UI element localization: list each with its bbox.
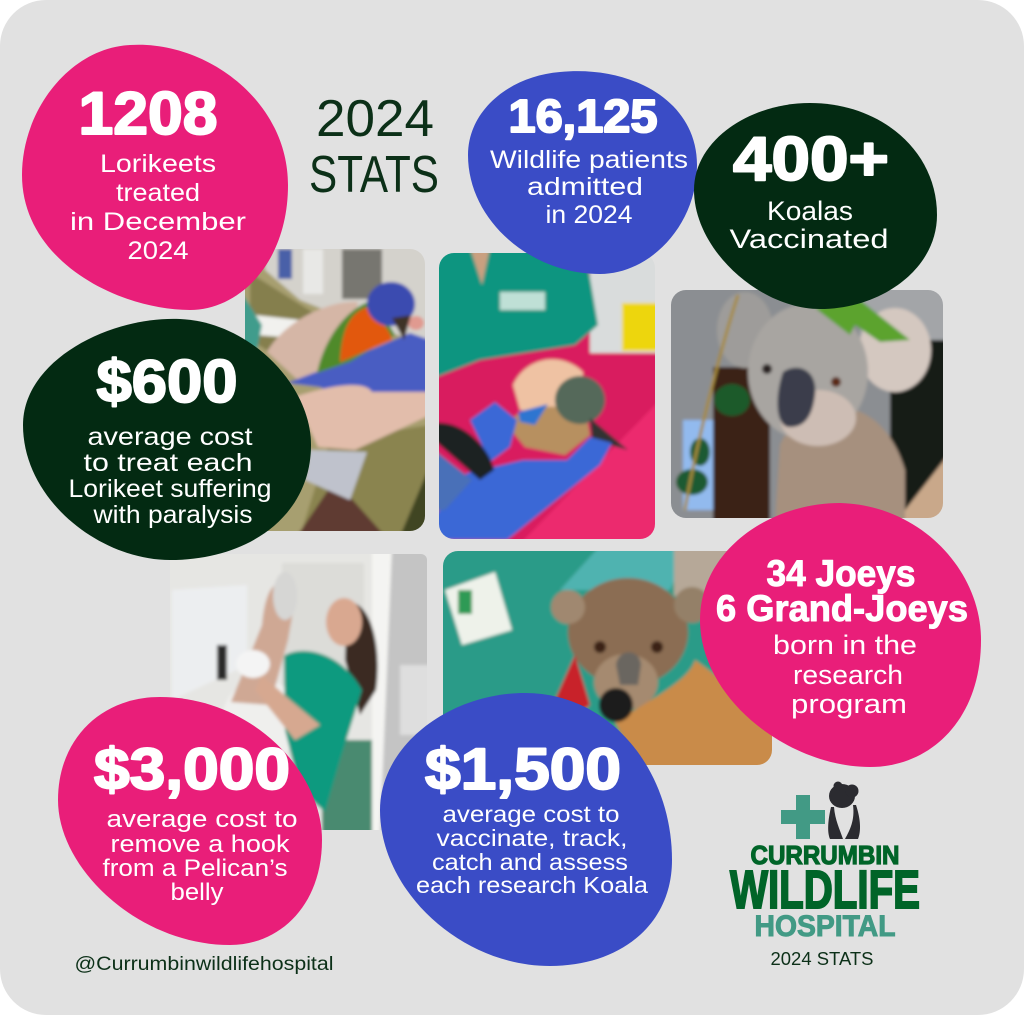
blob: 16,125 wildlife patients [468,71,697,274]
text: cost to treat lorikeet: to treat each [84,449,252,477]
text: born in research program: born in the [773,630,917,660]
blob: joeys born [700,503,981,767]
text: cost to vaccinate: average cost to [442,801,620,827]
title: 2024 stats: STATS [309,146,439,204]
photo: koala with eucalyptus [666,285,948,523]
text: wildlife patients admitted: Wildlife patients [490,146,688,174]
text: lorikeets treated [70,150,246,265]
photo: koala joey with teddy [438,546,777,770]
text: koalas vaccinated: Vaccinated [730,224,888,254]
text: cost to treat lorikeet: Lorikeet suffering [68,475,272,503]
stat: joeys and grand-joeys: 6 Grand-Joeys [716,588,968,629]
stat: joeys and grand-joeys [716,553,968,629]
photo: lorikeet held in blue towel [240,244,430,536]
photo: kingfisher on red blanket [434,248,660,544]
text: cost to remove hook: average cost to [106,806,298,833]
icon: koala silhouette [828,782,860,839]
social handle: @Currumbinwildlifehospital [74,954,334,975]
text: wildlife patients admitted [490,146,688,229]
text: cost to remove hook [102,806,298,906]
text: cost to vaccinate [416,801,648,898]
stat: 1208: 1208 [78,80,218,147]
logo: currumbin wildlife hospital [730,782,920,943]
stat: 16,125: 16,125 [508,90,658,142]
text: cost to vaccinate: each research Koala [416,872,648,898]
blob: 1208 lorikeets [22,45,288,310]
text: hospital: HOSPITAL [754,910,896,943]
text: lorikeets treated: 2024 [128,237,189,265]
text: lorikeets treated: Lorikeets [100,150,216,178]
text: born in research program: research [793,660,903,690]
text: born in research program [773,630,917,719]
stat: $3,000: $3,000 [94,737,290,802]
text: born in research program: program [791,689,907,719]
text: lorikeets treated: treated [116,179,200,207]
text: cost to vaccinate: vaccinate, track, [436,825,628,851]
text: wildlife patients admitted: in 2024 [546,201,633,229]
text: cost to vaccinate: catch and assess [432,849,628,875]
title: 2024 stats: 2024 [316,90,434,148]
blob: $1,500 research koala [380,693,672,966]
text: wildlife: WILDLIFE [730,860,920,920]
text: lorikeets treated: in December [70,208,246,236]
blob: $3,000 hook removal [58,697,322,945]
stat: 400+: 400+ [733,125,889,194]
text: cost to treat lorikeet: average cost [88,423,253,451]
blob: $600 treatment cost [23,319,311,560]
stat: joeys and grand-joeys: 34 Joeys [766,553,916,594]
text: currumbin: CURRUMBIN [750,840,900,870]
text: cost to treat lorikeet: with paralysis [92,501,252,529]
text: cost to remove hook: remove a hook [110,831,291,858]
text: koalas vaccinated: Koalas [767,196,853,226]
text: wildlife patients admitted: admitted [527,173,643,201]
blob: 400+ koalas [694,103,937,309]
title: 2024 stats [309,90,439,204]
text: cost to remove hook: belly [170,879,224,906]
stat: $600: $600 [96,348,238,415]
text: koalas vaccinated [730,196,888,254]
caption: 2024 stats: 2024 STATS [770,949,874,969]
photo: vet holding pelican [165,549,432,835]
stat: $1,500: $1,500 [425,737,621,802]
text: cost to treat lorikeet [68,423,272,529]
icon: green cross [781,795,825,839]
text: cost to remove hook: from a Pelican’s [102,855,288,882]
